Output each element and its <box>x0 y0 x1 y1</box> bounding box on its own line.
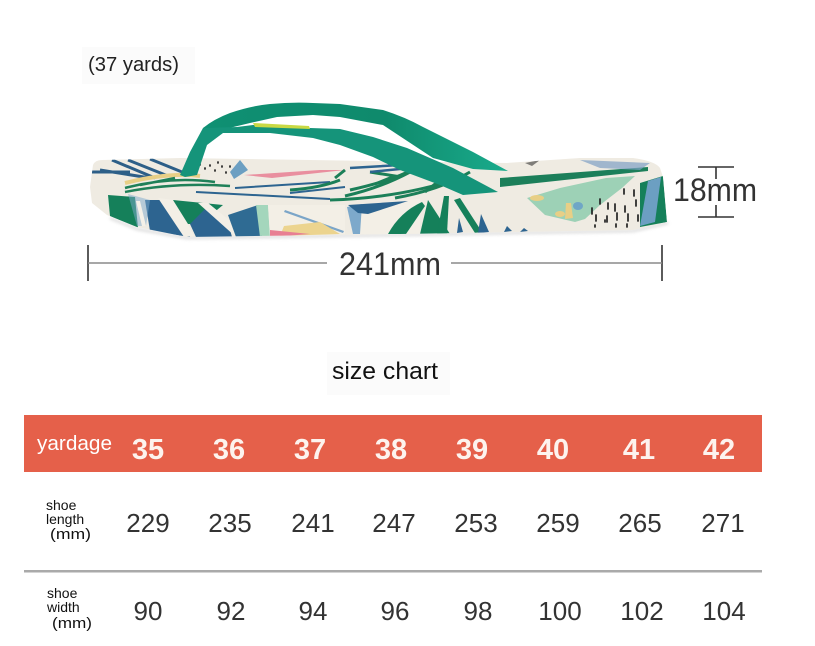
header row <box>24 415 762 472</box>
row: shoe width: 98 <box>464 596 492 626</box>
header row: 38 <box>375 434 407 466</box>
length dimension: 241mm <box>88 245 662 282</box>
row: shoe width: 90 <box>134 596 162 626</box>
side panel, right <box>347 199 420 234</box>
sole base <box>90 158 667 237</box>
size label: 37 yards: (37 yards) <box>88 54 179 76</box>
sandal illustration <box>90 103 668 238</box>
height dimension: 18mm <box>673 167 757 217</box>
row: shoe width: 104 <box>702 596 746 626</box>
length dimension: 241mm: 241mm <box>339 246 441 282</box>
row: shoe length: 253 <box>454 508 498 538</box>
top surface, heel <box>92 159 182 178</box>
sole print <box>92 159 667 237</box>
row: shoe width: 96 <box>381 596 409 626</box>
size chart table <box>24 415 762 632</box>
row: shoe length: (mm) <box>50 526 91 543</box>
row: shoe length: length <box>46 511 84 527</box>
header row: 36 <box>213 434 245 466</box>
row: shoe width: 100 <box>538 596 582 626</box>
strap: back band <box>203 103 508 171</box>
row: shoe width <box>46 585 746 632</box>
dotted pattern <box>190 162 638 227</box>
heading: size chart <box>327 352 450 395</box>
row: shoe width: shoe <box>47 585 78 601</box>
row: shoe width: 94 <box>299 596 327 626</box>
header row: 40 <box>537 434 569 466</box>
side panel, left <box>108 195 138 228</box>
row: shoe width: 102 <box>620 596 664 626</box>
header row: 35 <box>132 434 164 466</box>
heading: size chart: size chart <box>332 358 438 385</box>
row: shoe length: 259 <box>536 508 580 538</box>
header row: 37 <box>294 434 326 466</box>
strap: front band and post <box>180 125 498 195</box>
top surface, forefoot <box>500 167 648 187</box>
header row: 42 <box>703 434 735 466</box>
height dimension: 18mm: 18mm <box>673 172 757 208</box>
header row: yardage <box>37 433 112 455</box>
row: shoe length: 265 <box>618 508 662 538</box>
row: shoe width: 92 <box>217 596 245 626</box>
header row: 41 <box>623 434 655 466</box>
row: shoe length: 229 <box>126 508 170 538</box>
header row: 39 <box>456 434 488 466</box>
strap logo <box>253 123 310 129</box>
row: shoe length: 241 <box>291 508 335 538</box>
row: shoe length: 235 <box>208 508 252 538</box>
size label: 37 yards <box>82 47 195 84</box>
row: shoe width: width <box>46 599 80 615</box>
row: shoe width: (mm) <box>52 615 92 632</box>
row: shoe length <box>46 497 745 543</box>
row: shoe length: 271 <box>701 508 745 538</box>
row: shoe length: shoe <box>46 497 77 513</box>
row: shoe length: 247 <box>372 508 416 538</box>
